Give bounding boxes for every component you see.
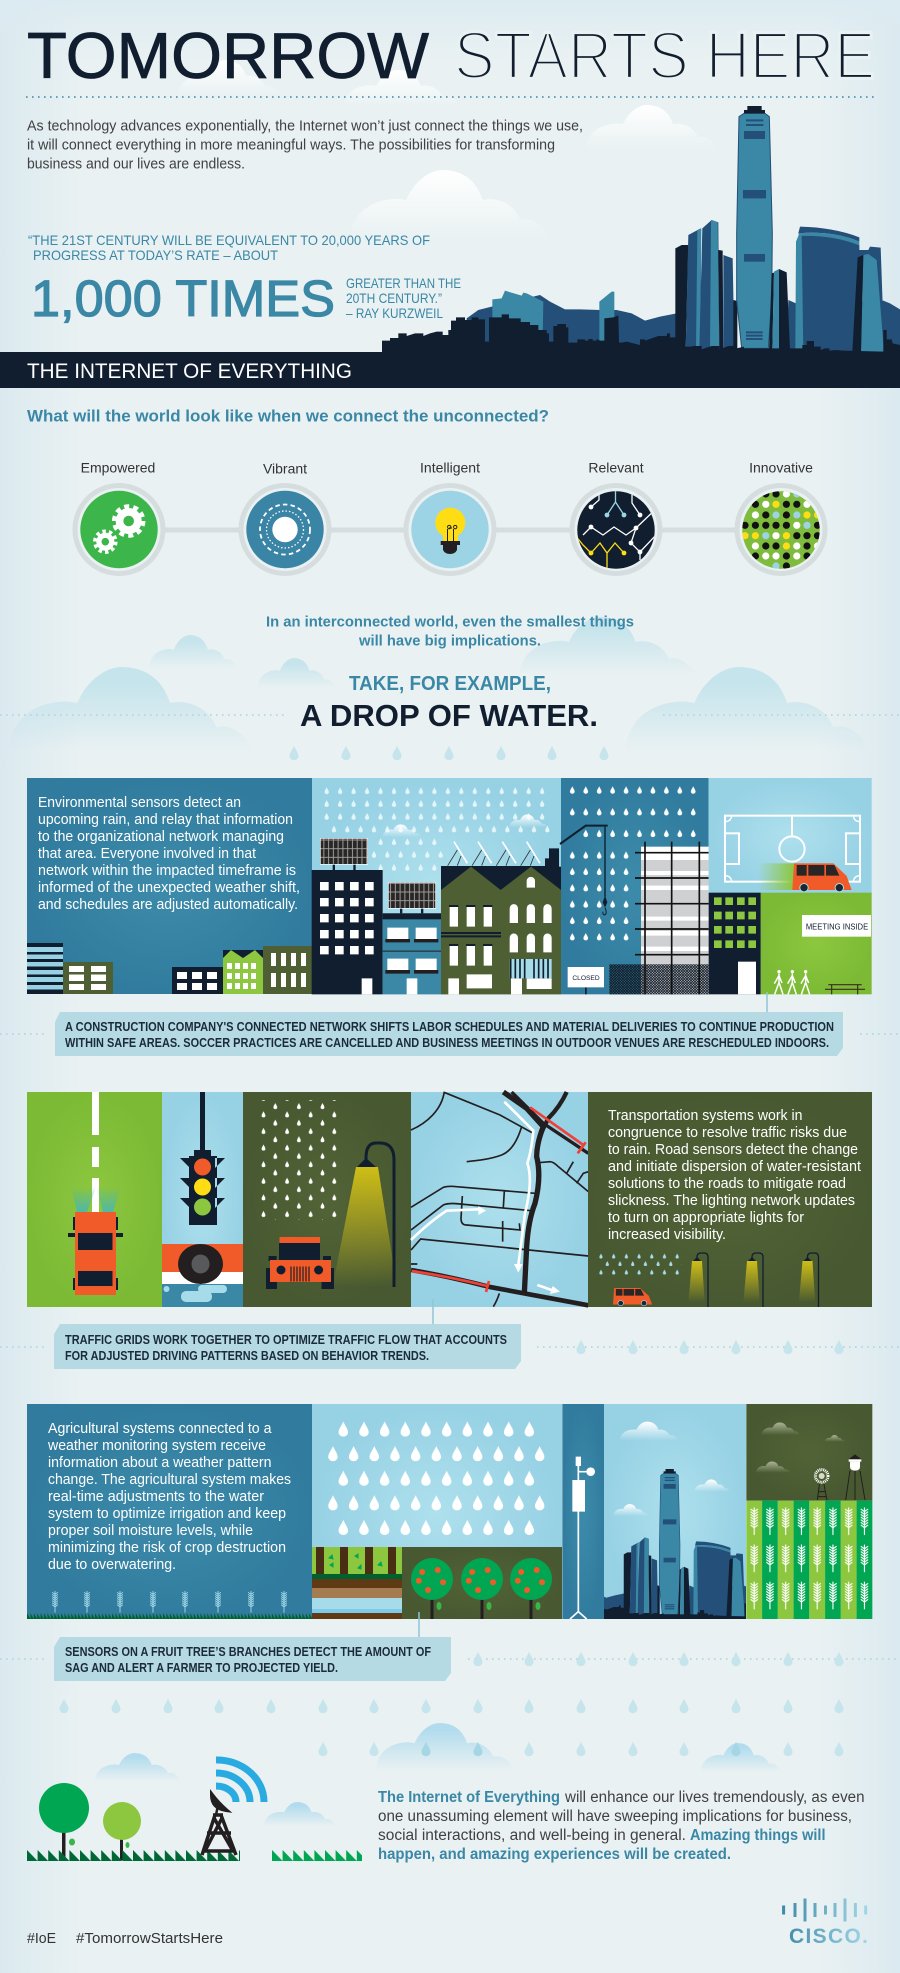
callout: fruit sensors: SENSORS ON A FRUIT TREE’S BRANCHES DETECT THE AMOUNT OF [65, 1644, 431, 1659]
title [27, 18, 875, 94]
wheat row [52, 1591, 287, 1613]
closed sign: CLOSED [572, 975, 600, 982]
drops row [290, 746, 608, 760]
agriculture text: due to overwatering. [48, 1557, 176, 1573]
small van [613, 1288, 652, 1306]
road map [411, 1092, 588, 1307]
scaffolded building [609, 842, 709, 994]
big rain [312, 1404, 562, 1619]
construction site [560, 778, 709, 994]
interconnected statement [266, 614, 634, 650]
green-window building [709, 893, 761, 994]
agriculture text [27, 1404, 312, 1619]
transportation text: Transportation systems work in [608, 1108, 802, 1124]
label: Innovative: Innovative [749, 460, 813, 476]
intro paragraph: it will connect everything in more meaningful ways. The possibilities for transforming [27, 136, 555, 154]
agriculture text: proper soil moisture levels, while [48, 1523, 253, 1539]
bottom rain rows [60, 1699, 844, 1713]
lower rain row [318, 1742, 844, 1756]
meeting inside sign: MEETING INSIDE [806, 922, 868, 931]
soccer field and meeting [709, 778, 872, 994]
bench [825, 985, 865, 994]
skyline [382, 106, 900, 370]
callout: fruit sensors: SAG AND ALERT A FARMER TO PROJECTED YIELD. [65, 1660, 338, 1675]
fruit trees [402, 1547, 562, 1619]
quote: 20TH CENTURY.” [346, 290, 442, 306]
soil layers and forest [312, 1547, 402, 1619]
icon: circuit [572, 486, 660, 575]
agriculture text: weather monitoring system receive [47, 1438, 266, 1454]
interconnected statement: will have big implications. [358, 632, 541, 650]
bottom clouds [95, 1723, 781, 1826]
callout: traffic grids: FOR ADJUSTED DRIVING PATTERNS BASED ON BEHAVIOR TRENDS. [65, 1348, 429, 1363]
closing statement [378, 1789, 864, 1863]
question heading: What will the world look like when we connect the unconnected? [27, 406, 549, 426]
landscape: trees and antenna [27, 1760, 362, 1861]
callout: traffic grids: TRAFFIC GRIDS WORK TOGETHER TO OPTIMIZE TRAFFIC FLOW THAT ACCOUNTS [65, 1332, 507, 1347]
label: Intelligent: Intelligent [420, 460, 480, 476]
small tree [103, 1802, 141, 1860]
heading: take for example [300, 673, 598, 733]
olive townhouses [441, 842, 561, 994]
drops row [474, 1652, 844, 1666]
panel text block: to the organizational network managing [38, 829, 284, 845]
panel text block: network within the impacted timeframe is [38, 863, 296, 879]
agriculture text: information about a weather pattern [48, 1455, 272, 1471]
drops row [576, 1340, 844, 1354]
icon: gears [75, 486, 163, 574]
agriculture text: change. The agricultural system makes [48, 1472, 291, 1488]
closing statement: will enhance our lives tremendously, as even [564, 1789, 864, 1806]
section band: THE INTERNET OF EVERYTHING [27, 360, 352, 383]
farm field [746, 1404, 872, 1619]
heading: take for example: A DROP OF WATER. [300, 698, 598, 733]
icon: light bulb [406, 486, 494, 574]
panel: environmental sensors [27, 778, 872, 994]
cisco logo [782, 1898, 868, 1948]
connector line [119, 528, 781, 532]
qualities row [75, 460, 825, 575]
transportation text [588, 1092, 872, 1307]
panel text block: informed of the unexpected weather shift, [38, 880, 300, 896]
callout connector [432, 1299, 434, 1324]
water tower [846, 1454, 865, 1500]
rain sky and rooftops [312, 778, 561, 994]
cisco logo: CISCO. [789, 1925, 868, 1948]
soccer field [725, 816, 860, 882]
road and car [27, 1092, 162, 1307]
quote: 1,000 TIMES [31, 270, 335, 327]
quote [28, 232, 461, 327]
section band [0, 352, 900, 388]
header clouds [178, 60, 718, 240]
callout: construction [55, 1012, 843, 1056]
hashtags: #TomorrowStartsHere [76, 1930, 223, 1947]
traffic light and tire [162, 1092, 243, 1307]
windmill [815, 1470, 828, 1500]
agriculture text: real-time adjustments to the water [48, 1489, 264, 1505]
intro paragraph: As technology advances exponentially, the Internet won’t just connect the things we use, [27, 118, 583, 134]
agriculture text: minimizing the risk of crop destruction [48, 1540, 286, 1556]
panel: agriculture [27, 1404, 872, 1627]
intro paragraph: business and our lives are endless. [27, 156, 245, 172]
small rain [597, 1252, 682, 1276]
wifi signal arcs [216, 1760, 264, 1802]
quote: GREATER THAN THE [346, 275, 461, 291]
title: TOMORROW [27, 19, 430, 92]
label: Vibrant: Vibrant [263, 460, 307, 476]
closing statement: The Internet of Everything [378, 1789, 560, 1806]
panel text block: Environmental sensors detect an [38, 795, 241, 811]
crop stripes [746, 1501, 872, 1619]
big tree [39, 1783, 89, 1860]
agriculture text: system to optimize irrigation and keep [48, 1506, 286, 1522]
icon: dot grid [737, 486, 825, 574]
crane [560, 826, 608, 844]
transportation text: increased visibility. [608, 1227, 726, 1243]
label: Empowered: Empowered [81, 460, 155, 476]
transportation text: congruence to resolve traffic risks due [608, 1125, 847, 1141]
mini skyline panel [604, 1404, 746, 1619]
transportation text: and initiate dispersion of water-resistant [608, 1159, 861, 1175]
jeep in rain with street lamp [243, 1092, 411, 1307]
closing statement: social interactions, and well-being in general. [378, 1827, 686, 1844]
closing statement: one unassuming element will have sweeping implications for business, [378, 1808, 852, 1825]
closing statement: happen, and amazing experiences will be created. [378, 1846, 731, 1863]
callout: traffic grids [54, 1324, 521, 1369]
grass [27, 1850, 240, 1861]
weather sensor pole [562, 1404, 604, 1619]
meeting inside sign [802, 915, 871, 937]
interconnected statement: In an interconnected world, even the smallest things [266, 614, 634, 630]
transportation text: slickness. The lighting network updates [608, 1193, 855, 1209]
hashtags: #IoE [27, 1930, 56, 1947]
panel text block: upcoming rain, and relay that information [38, 812, 293, 828]
antenna tower [202, 1795, 236, 1855]
transportation text: to rain. Road sensors detect the change [608, 1142, 858, 1158]
intro paragraph [27, 118, 583, 172]
panel: transportation [27, 1092, 872, 1307]
callout connector [418, 1612, 420, 1637]
quote: – RAY KURZWEIL [346, 305, 443, 321]
quote: PROGRESS AT TODAY’S RATE – ABOUT [33, 247, 278, 263]
drop-section clouds [9, 617, 870, 751]
small lamps [688, 1253, 818, 1307]
blue apartment [383, 882, 441, 994]
quote: “THE 21ST CENTURY WILL BE EQUIVALENT TO 20,000 YEARS OF [28, 232, 430, 248]
solar office building [312, 838, 383, 994]
closed sign [568, 967, 604, 994]
heading: take for example: TAKE, FOR EXAMPLE, [349, 673, 551, 695]
small buildings [27, 943, 312, 994]
panel text block: that area. Everyone involved in that [38, 846, 256, 862]
callout: fruit sensors [54, 1637, 451, 1681]
people [774, 970, 810, 994]
panel text block [27, 778, 312, 994]
icon: rings [241, 486, 329, 574]
transportation text: solutions to the roads to mitigate road [608, 1176, 846, 1192]
callout connector [766, 992, 768, 1012]
transportation text: to turn on appropriate lights for [608, 1210, 804, 1226]
label: Relevant: Relevant [588, 460, 644, 476]
panel text block: and schedules are adjusted automatically. [38, 897, 298, 913]
van [792, 863, 852, 892]
agriculture text: Agricultural systems connected to a [48, 1421, 272, 1437]
closing statement: Amazing things will [690, 1827, 826, 1844]
